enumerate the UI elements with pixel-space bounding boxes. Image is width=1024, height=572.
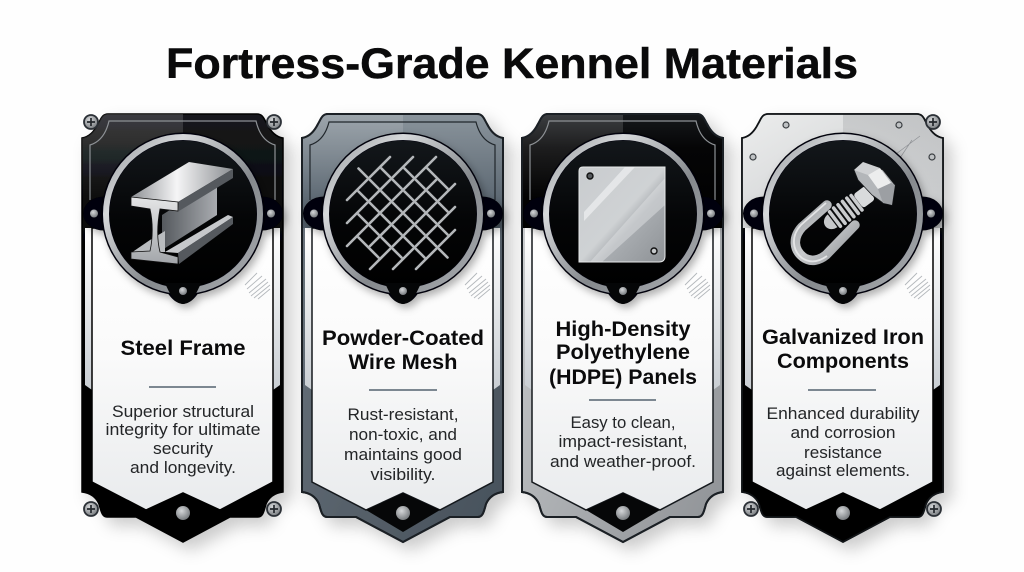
description: impact-resistant, <box>558 433 688 451</box>
divider <box>808 389 876 391</box>
description: and weather-proof. <box>550 453 696 471</box>
panel: HDPE panels <box>522 114 723 542</box>
panel: steel frame <box>82 114 283 542</box>
description: Superior structural <box>112 403 254 421</box>
description: integrity for ultimate <box>106 421 260 439</box>
divider <box>369 389 437 391</box>
card body <box>742 114 943 542</box>
card body <box>82 114 283 542</box>
heading <box>322 327 484 374</box>
heading: Wire Mesh <box>348 351 458 374</box>
description: and corrosion <box>790 424 896 442</box>
description: visibility. <box>370 466 436 484</box>
description <box>344 406 462 484</box>
corner screws <box>84 115 281 516</box>
corner screws <box>744 115 941 516</box>
heading: Polyethylene <box>556 341 690 364</box>
icon: steel I-beam <box>131 162 233 264</box>
panel: galvanized iron components <box>742 114 943 542</box>
heading: High-Density <box>556 318 691 341</box>
description <box>766 405 920 480</box>
description: against elements. <box>776 462 910 480</box>
heading: Galvanized Iron <box>762 326 924 349</box>
description: Enhanced durability <box>766 405 920 423</box>
description: non-toxic, and <box>349 426 457 444</box>
description: Rust-resistant, <box>348 406 458 424</box>
description: and longevity. <box>130 459 236 477</box>
divider <box>149 386 216 388</box>
heading <box>549 318 697 389</box>
icon: HDPE sheet <box>579 167 665 262</box>
heading <box>762 326 924 373</box>
heading: Steel Frame <box>120 337 246 360</box>
card body <box>522 114 723 542</box>
panel: powder-coated wire mesh <box>302 114 503 542</box>
description: security <box>153 440 214 458</box>
divider <box>589 399 656 401</box>
heading: (HDPE) Panels <box>549 366 697 389</box>
title: Fortress-Grade Kennel Materials <box>166 40 858 88</box>
description: Easy to clean, <box>570 414 676 432</box>
description <box>550 414 696 471</box>
heading: Powder-Coated <box>322 327 484 350</box>
icon: wire mesh <box>347 157 455 269</box>
icon: bolt and link <box>794 162 895 261</box>
heading: Components <box>777 350 909 373</box>
description: maintains good <box>344 446 462 464</box>
description <box>106 403 260 477</box>
card body <box>302 114 503 542</box>
description: resistance <box>804 444 882 462</box>
